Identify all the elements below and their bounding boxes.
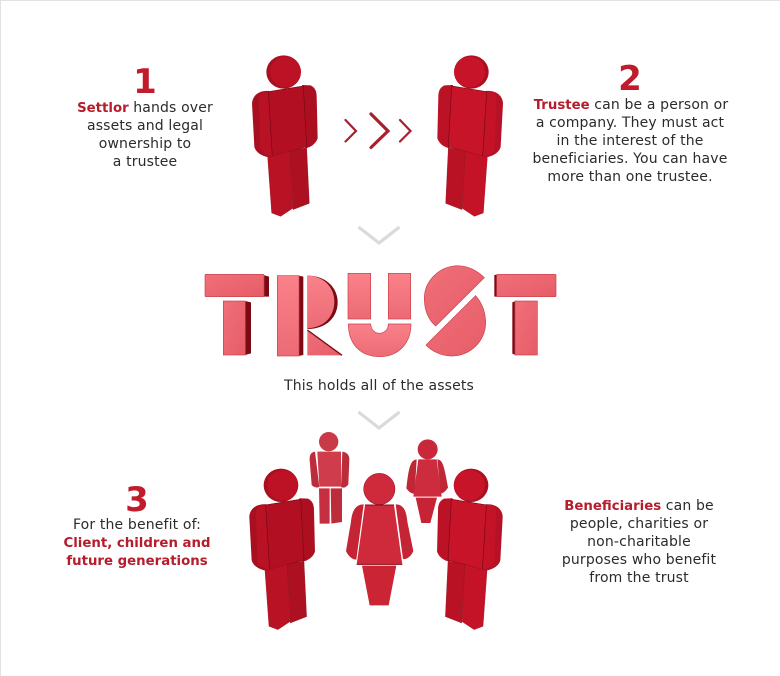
icon: right man (437, 469, 503, 630)
letter T (205, 274, 269, 355)
settlor description: ownership to (99, 136, 191, 152)
letter S (424, 266, 486, 356)
settlor description: Settlor hands over (77, 100, 213, 116)
beneficiaries text block: purposes who benefit (562, 552, 716, 568)
number 1: 1 (133, 62, 157, 102)
arrow: grey chevron down to trust (358, 227, 400, 243)
trustee description: more than one trustee. (547, 169, 713, 185)
settlor description (77, 100, 213, 170)
settlor description: assets and legal (87, 118, 203, 134)
icon: beneficiary group (249, 432, 503, 630)
arrow: triple chevrons pointing to trustee (346, 114, 410, 148)
trustee description: a company. They must act (536, 115, 725, 131)
step 3: benefit text block (63, 480, 211, 569)
beneficiaries text block: Beneficiaries can be (564, 498, 714, 514)
letter T (494, 274, 556, 355)
number 2: 2 (618, 59, 642, 99)
benefit description: For the benefit of: (73, 517, 201, 533)
benefit description (63, 517, 211, 569)
benefit description: Client, children and (63, 536, 211, 551)
trustee description (532, 97, 728, 185)
beneficiaries text block: non-charitable (587, 534, 691, 550)
icon: centre woman (346, 473, 413, 605)
icon: trustee figure (437, 55, 503, 216)
trustee description: Trustee can be a person or (534, 97, 728, 113)
number 3: 3 (125, 480, 149, 520)
benefit description: future generations (66, 554, 208, 569)
trustee description: in the interest of the (556, 133, 704, 149)
beneficiaries text block (562, 498, 716, 586)
caption: this holds all of the assets: This holds all of the assets (283, 378, 474, 394)
icon: small woman (406, 439, 448, 523)
letter U (348, 273, 411, 357)
letter R (277, 276, 342, 356)
step 2: trustee text block (532, 59, 728, 185)
beneficiaries text block: people, charities or (570, 516, 708, 532)
trustee description: beneficiaries. You can have (532, 151, 728, 167)
settlor description: a trustee (113, 154, 177, 170)
arrow: grey chevron down to beneficiaries (358, 412, 400, 428)
icon: small man (310, 432, 349, 524)
icon: left man (249, 469, 315, 630)
beneficiaries text block: from the trust (589, 570, 689, 586)
icon: settlor figure (252, 55, 318, 216)
heading: TRUST block letters (205, 266, 556, 357)
step 1: settlor text block (77, 62, 213, 170)
